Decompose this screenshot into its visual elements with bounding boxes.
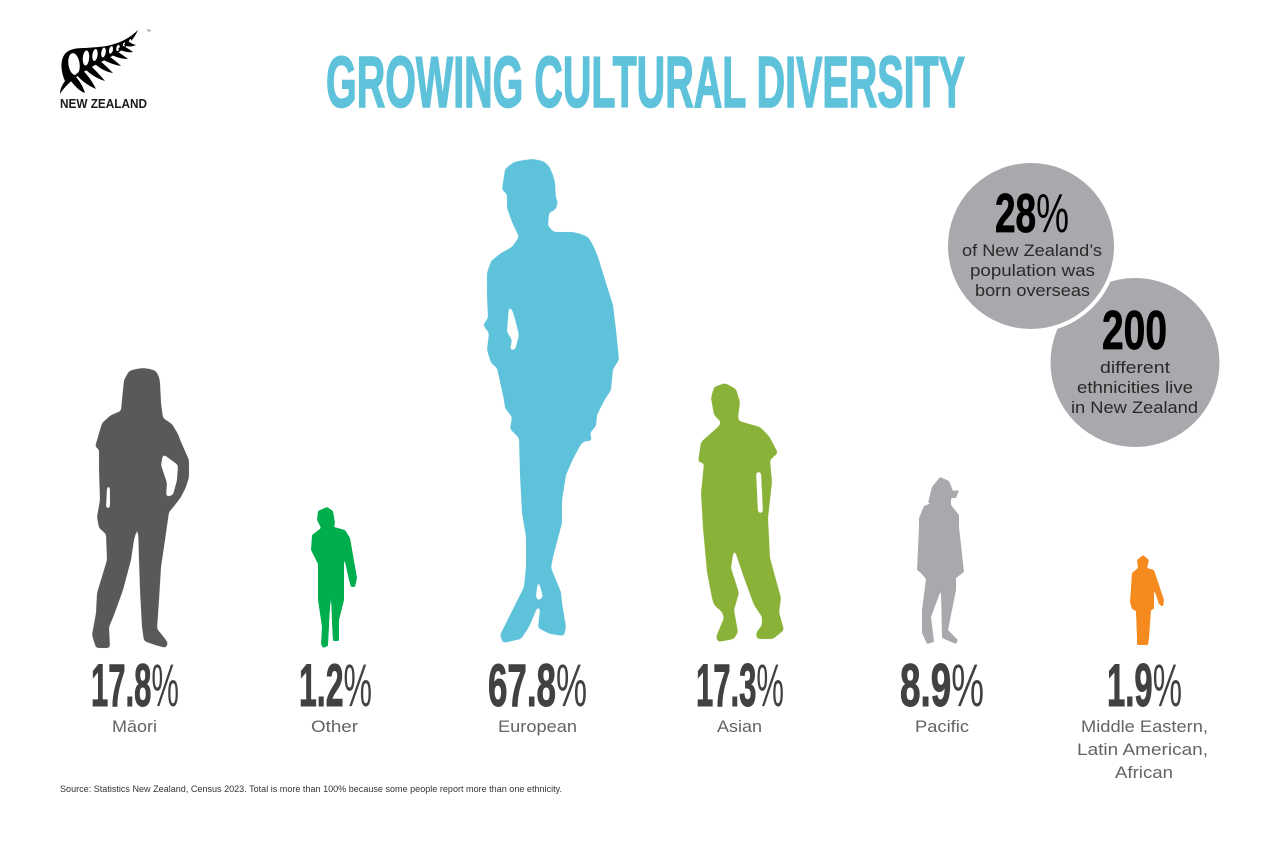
- stat: European: 67.8%: [488, 652, 587, 719]
- callout: 200 ethnicities: in New Zealand: [1071, 398, 1198, 417]
- callout: 28% born overseas: 28%: [995, 182, 1069, 244]
- trademark: ™: [146, 29, 151, 35]
- stat: Middle Eastern, Latin American, African: Middle Eastern,: [1081, 717, 1208, 736]
- silhouette: Pacific: [917, 477, 964, 644]
- callout: 28% born overseas: [946, 161, 1116, 331]
- logo: New Zealand fern mark: [60, 29, 151, 111]
- silhouette: Middle Eastern, Latin American, African: [1130, 555, 1164, 645]
- stat: Pacific: [900, 652, 984, 736]
- stat: Asian: 17.3%: [696, 652, 784, 719]
- stat: Middle Eastern, Latin American, African: [1077, 652, 1208, 782]
- logo wordmark: NEW ZEALAND: [60, 96, 147, 111]
- stat: Māori: 17.8%: [91, 652, 179, 719]
- source note: Source: Statistics New Zealand, Census 2023. Total is more than 100% because some people report more than one ethnicity.: [60, 784, 562, 795]
- callout: 200 ethnicities: [1050, 278, 1220, 447]
- callout: 200 ethnicities: ethnicities live: [1077, 378, 1193, 397]
- stat: Other: Other: [311, 717, 358, 736]
- callout: 200 ethnicities: 200: [1102, 299, 1167, 361]
- callout: 200 ethnicities: different: [1100, 358, 1170, 377]
- stat: Other: [299, 652, 372, 736]
- stat: Pacific: Pacific: [915, 717, 970, 736]
- callout: 28% born overseas: population was: [970, 261, 1095, 280]
- icon: silver fern: [60, 30, 138, 94]
- stat: Pacific: 8.9%: [900, 652, 984, 719]
- callout: 28% born overseas: of New Zealand’s: [962, 241, 1102, 260]
- silhouette: European: [483, 159, 619, 643]
- silhouette: Other: [311, 507, 357, 648]
- silhouette: Asian: [698, 383, 784, 642]
- callout: 28% born overseas: born overseas: [975, 281, 1090, 300]
- stat: Middle Eastern, Latin American, African: African: [1115, 763, 1173, 782]
- stat: Māori: [91, 652, 179, 736]
- stat: Middle Eastern, Latin American, African: 1.9%: [1107, 652, 1182, 719]
- stat: Asian: [696, 652, 784, 736]
- stat: Other: 1.2%: [299, 652, 372, 719]
- stat: Māori: Māori: [112, 717, 157, 736]
- silhouette: Māori: [92, 368, 189, 648]
- stat: Middle Eastern, Latin American, African: Latin American,: [1077, 740, 1208, 759]
- stat: European: [488, 652, 587, 736]
- stat: Asian: Asian: [717, 717, 762, 736]
- stat: European: European: [498, 717, 577, 736]
